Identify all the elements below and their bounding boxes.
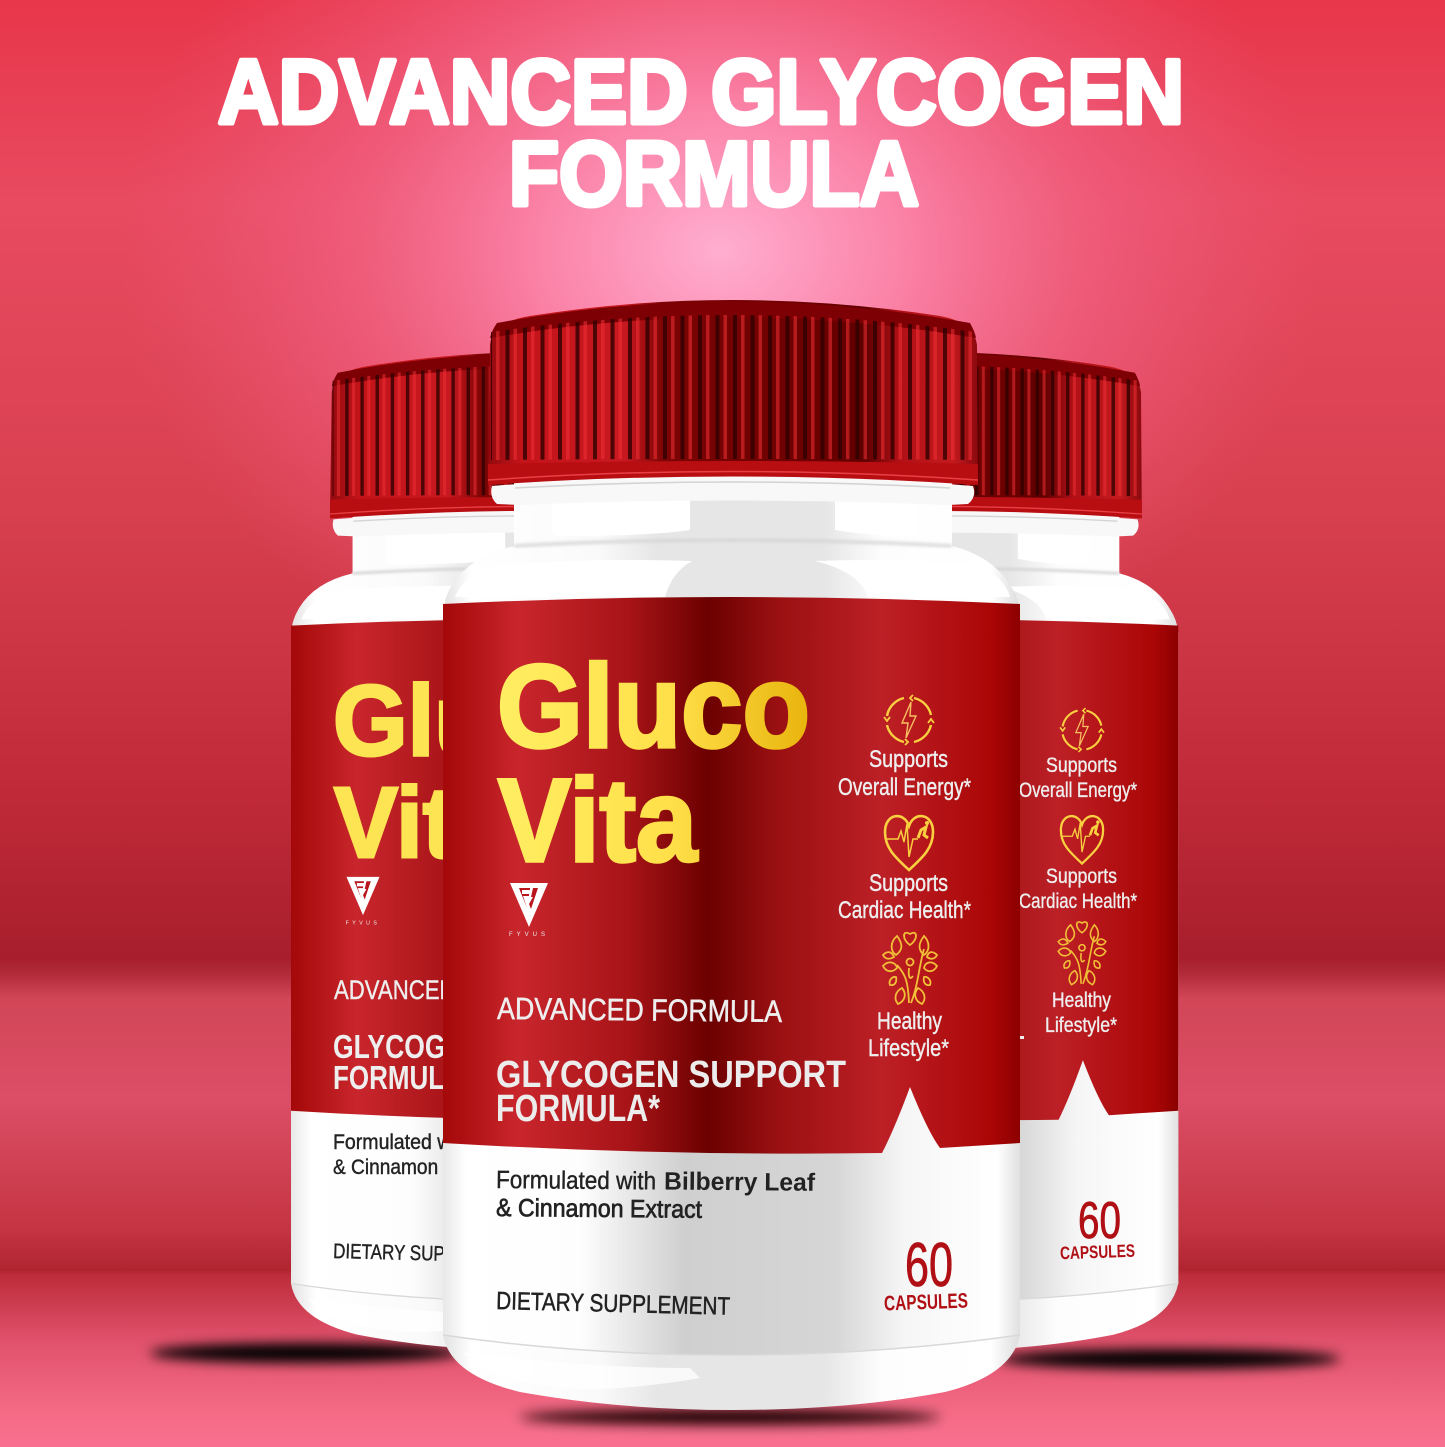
right bottle text: healthy lifestyle: Lifestyle* <box>1045 1014 1117 1037</box>
center bottle logo: FYVUS <box>509 932 549 938</box>
title: ADVANCED GLYCOGEN <box>218 42 1184 143</box>
center bottle capsule count: CAPSULES <box>884 1290 968 1315</box>
left bottle logo: FYVUS <box>346 921 380 927</box>
center bottle brand name <box>497 641 810 887</box>
center bottle icon: tree <box>883 933 937 1004</box>
right bottle capsule count: CAPSULES <box>1060 1241 1135 1263</box>
center bottle text: glycogen support formula: FORMULA* <box>496 1088 660 1130</box>
center bottle brand name: Vita <box>498 755 698 887</box>
right bottle capsule count: 60 <box>1078 1192 1121 1250</box>
left bottle label text: ADVANCED FORMULA <box>334 975 570 1005</box>
center bottle logo <box>509 883 549 938</box>
right bottle icon: heart <box>1061 816 1103 864</box>
right bottle text: supports overall energy: Overall Energy* <box>1019 779 1137 802</box>
center bottle text: glycogen support formula <box>496 1054 846 1130</box>
center bottle icon: heart <box>885 816 933 870</box>
center bottle <box>443 300 1020 1410</box>
right bottle text: healthy lifestyle: Healthy <box>1052 989 1111 1012</box>
center bottle capsule count: 60 <box>905 1231 953 1300</box>
center bottle text: healthy lifestyle <box>868 1008 949 1062</box>
title: FORMULA <box>509 124 919 225</box>
center bottle capsule count <box>884 1231 968 1315</box>
floor shadows <box>150 1343 1340 1425</box>
center bottle text: glycogen support formula: GLYCOGEN SUPPORT <box>496 1054 846 1096</box>
left bottle logo <box>346 877 380 927</box>
center bottle text: ingredients: Bilberry Leaf <box>664 1168 816 1197</box>
left bottle label text: DIETARY SUPPLEMENT <box>333 1240 526 1268</box>
center bottle text: dietary supplement: DIETARY SUPPLEMENT <box>496 1287 730 1321</box>
left bottle label text: FORMULA* <box>333 1059 473 1096</box>
center bottle text: supports cardiac health: Supports <box>869 870 948 897</box>
title <box>218 42 1184 225</box>
center bottle text: ingredients <box>496 1166 816 1224</box>
right bottle text: supports overall energy <box>1019 754 1137 802</box>
left bottle brand name: Vita <box>334 767 509 879</box>
right bottle text: supports cardiac health: Supports <box>1046 865 1117 888</box>
center bottle text: ingredients: & Cinnamon Extract <box>496 1194 702 1224</box>
center bottle icon: energy <box>884 695 934 745</box>
left bottle brand name <box>333 665 605 879</box>
left bottle brand name: Gluco <box>333 665 605 777</box>
left bottle label text: Formulated with <box>333 1131 472 1154</box>
center bottle text: supports cardiac health: Cardiac Health* <box>838 897 971 924</box>
center bottle text: advanced formula: ADVANCED FORMULA <box>497 991 783 1029</box>
right bottle text: supports cardiac health: Cardiac Health* <box>1019 890 1137 913</box>
center bottle text: supports overall energy: Overall Energy* <box>838 774 971 801</box>
left bottle label text <box>333 975 618 1268</box>
right bottle icon: tree <box>1058 922 1106 985</box>
left bottle label text: GLYCOGEN SUPPORT <box>333 1028 618 1065</box>
center bottle text: ingredients: Formulated with <box>496 1166 656 1195</box>
right bottle text: healthy lifestyle <box>1045 989 1117 1037</box>
right bottle text: supports overall energy: Supports <box>1046 754 1117 777</box>
center bottle text: healthy lifestyle: Lifestyle* <box>868 1035 949 1062</box>
center bottle text: supports cardiac health <box>838 870 971 924</box>
right bottle <box>678 352 1178 1351</box>
left bottle label text: & Cinnamon Extract <box>333 1156 503 1179</box>
center bottle text: supports overall energy <box>838 746 971 801</box>
center bottle text: supports overall energy: Supports <box>869 746 948 773</box>
right bottle icon: energy <box>1060 708 1104 752</box>
right bottle capsule count <box>1060 1192 1135 1263</box>
center bottle text: healthy lifestyle: Healthy <box>877 1008 942 1035</box>
left bottle <box>291 352 791 1351</box>
right bottle text: supports cardiac health <box>1019 865 1137 913</box>
center bottle brand name: Gluco <box>497 641 810 773</box>
